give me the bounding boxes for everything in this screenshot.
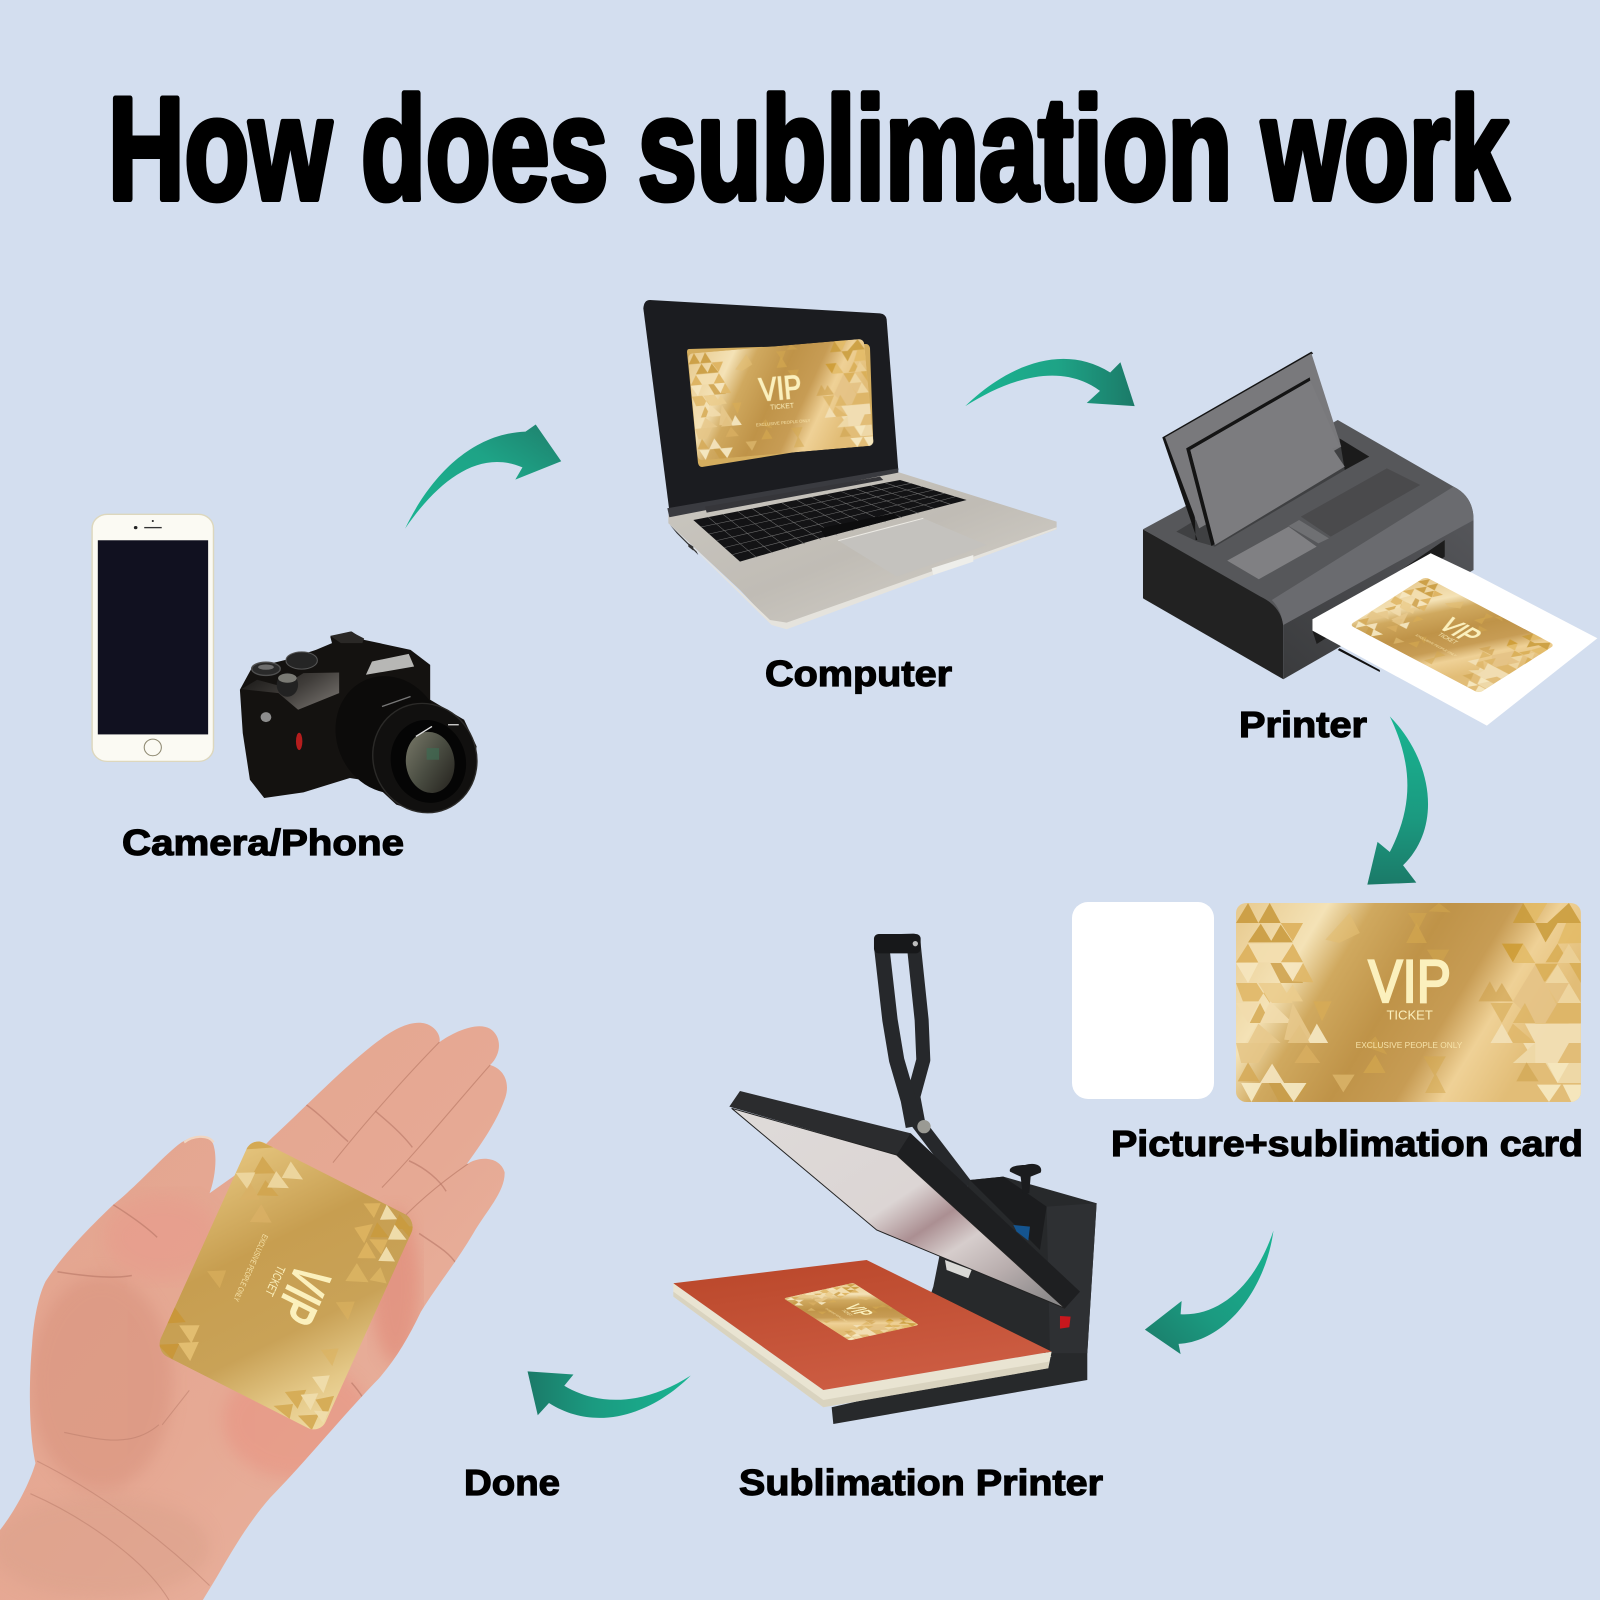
label: Computer: Computer	[765, 653, 952, 694]
icon: heat press	[673, 934, 1097, 1424]
card on heat press	[783, 1283, 919, 1341]
label: Done: Done	[464, 1462, 560, 1503]
card on printed paper: TICKET	[1436, 633, 1459, 645]
icon: printer	[1143, 352, 1597, 726]
card on hand: VIP	[264, 1255, 342, 1334]
gold VIP card: TICKET	[1386, 1008, 1433, 1023]
card on laptop screen: EXCLUSIVE PEOPLE ONLY	[756, 418, 811, 427]
card on laptop screen: TICKET	[770, 402, 795, 412]
card on heat press: TICKET	[840, 1309, 855, 1316]
arrow: computer to printer	[965, 359, 1135, 406]
label: Picture+sublimation card: Picture+sublimation card	[1111, 1123, 1583, 1164]
card on heat press: EXCLUSIVE PEOPLE ONLY	[824, 1308, 849, 1322]
card on laptop screen: VIP	[758, 368, 803, 408]
trackpad	[838, 518, 987, 577]
arrow: card to press	[1145, 1231, 1273, 1354]
card on hand: TICKET	[262, 1263, 287, 1298]
icon: laptop	[643, 300, 1057, 629]
card on hand: EXCLUSIVE PEOPLE ONLY	[231, 1233, 269, 1303]
card on heat press: VIP	[839, 1302, 879, 1318]
icon: smartphone	[92, 514, 213, 761]
arrow: printer to card	[1367, 716, 1428, 885]
arrow: press to done	[528, 1371, 691, 1418]
gold VIP card: VIP	[1368, 948, 1451, 1015]
card on printed paper: VIP	[1432, 614, 1489, 647]
gold VIP card	[1236, 903, 1581, 1102]
arrow: camera to computer	[405, 424, 561, 529]
icon: hand	[0, 1023, 507, 1600]
card on printed paper	[1349, 577, 1555, 693]
gold VIP card: EXCLUSIVE PEOPLE ONLY	[1356, 1040, 1462, 1050]
keyboard	[693, 480, 967, 562]
card on laptop screen	[687, 339, 874, 467]
label: Printer: Printer	[1239, 704, 1367, 745]
card on printed paper: EXCLUSIVE PEOPLE ONLY	[1414, 634, 1458, 657]
icon: camera	[240, 632, 488, 822]
blank white card	[1072, 902, 1214, 1099]
card on hand	[155, 1137, 417, 1434]
arrows	[405, 359, 1428, 1418]
label: Camera/Phone: Camera/Phone	[122, 822, 404, 863]
label: Sublimation Printer: Sublimation Printer	[739, 1462, 1103, 1503]
